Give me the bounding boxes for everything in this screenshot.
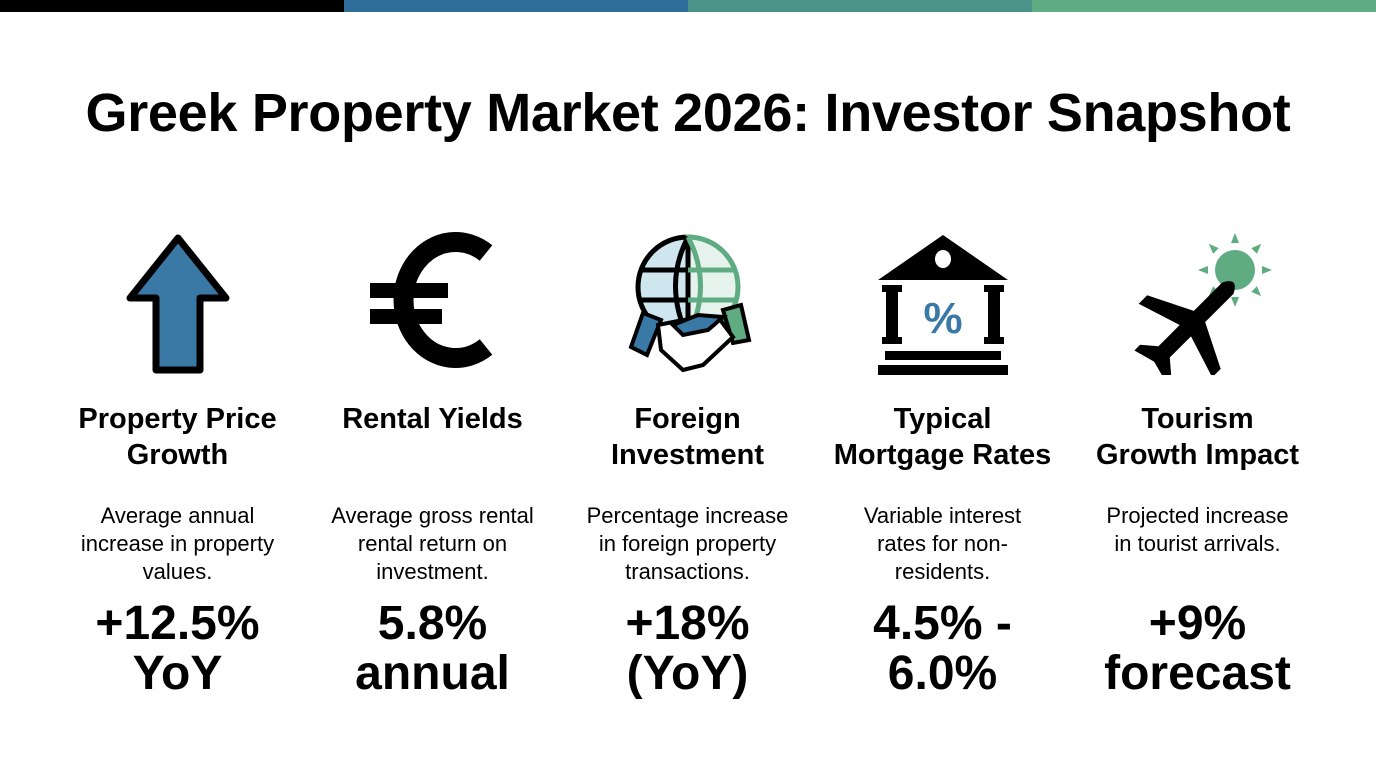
heading: Mortgage Rates — [834, 439, 1051, 471]
icon: euro — [370, 232, 492, 368]
icon: plane and sun — [1134, 233, 1272, 375]
value: (YoY) — [627, 647, 748, 700]
description: values. — [143, 559, 212, 584]
panel: foreign investment — [587, 234, 788, 700]
heading — [78, 403, 277, 471]
heading: Investment — [611, 439, 764, 471]
panel: mortgage rates — [834, 235, 1051, 700]
description: rates for non- — [877, 531, 1008, 556]
value: annual — [355, 647, 510, 700]
value: +12.5% — [95, 597, 260, 650]
value: 6.0% — [888, 647, 997, 700]
description: Projected increase — [1106, 503, 1289, 528]
description: in tourist arrivals. — [1114, 531, 1281, 556]
heading: Typical — [894, 403, 991, 435]
description — [331, 503, 534, 584]
title: Greek Property Market 2026: Investor Snapshot — [86, 83, 1290, 143]
value: YoY — [133, 647, 222, 700]
value: 5.8% — [378, 597, 487, 650]
description: increase in property — [81, 531, 274, 556]
description — [864, 503, 1021, 584]
heading — [611, 403, 764, 471]
description: in foreign property — [599, 531, 776, 556]
icon: bank percent — [878, 235, 1008, 375]
heading: Tourism — [1141, 403, 1254, 435]
icon: bank percent: % — [923, 294, 962, 343]
panel: property price growth — [78, 234, 277, 700]
heading: Growth Impact — [1096, 439, 1299, 471]
heading: Rental Yields — [342, 403, 523, 435]
heading: Growth — [127, 439, 228, 471]
value — [1104, 597, 1291, 700]
panel: rental yields — [331, 232, 534, 700]
heading — [1096, 403, 1299, 471]
value — [95, 597, 260, 700]
description — [587, 503, 788, 584]
panel: tourism — [1096, 233, 1299, 700]
top color bar — [0, 0, 1376, 12]
heading: Property Price — [78, 403, 277, 435]
heading: Foreign — [634, 403, 741, 435]
description: rental return on — [358, 531, 507, 556]
description — [1106, 503, 1289, 556]
description: Average gross rental — [331, 503, 534, 528]
value: +18% — [625, 597, 750, 650]
description: transactions. — [625, 559, 750, 584]
description: residents. — [895, 559, 990, 584]
heading — [834, 403, 1051, 471]
description — [81, 503, 274, 584]
value: forecast — [1104, 647, 1291, 700]
value — [355, 597, 510, 700]
description: investment. — [376, 559, 489, 584]
value — [625, 597, 750, 700]
description: Average annual — [101, 503, 254, 528]
description: Percentage increase — [587, 503, 788, 528]
description: Variable interest — [864, 503, 1021, 528]
icon: up arrow — [126, 234, 230, 374]
value: 4.5% - — [873, 597, 1012, 650]
icon: globe handshake — [628, 234, 752, 372]
value — [873, 597, 1012, 700]
value: +9% — [1149, 597, 1246, 650]
